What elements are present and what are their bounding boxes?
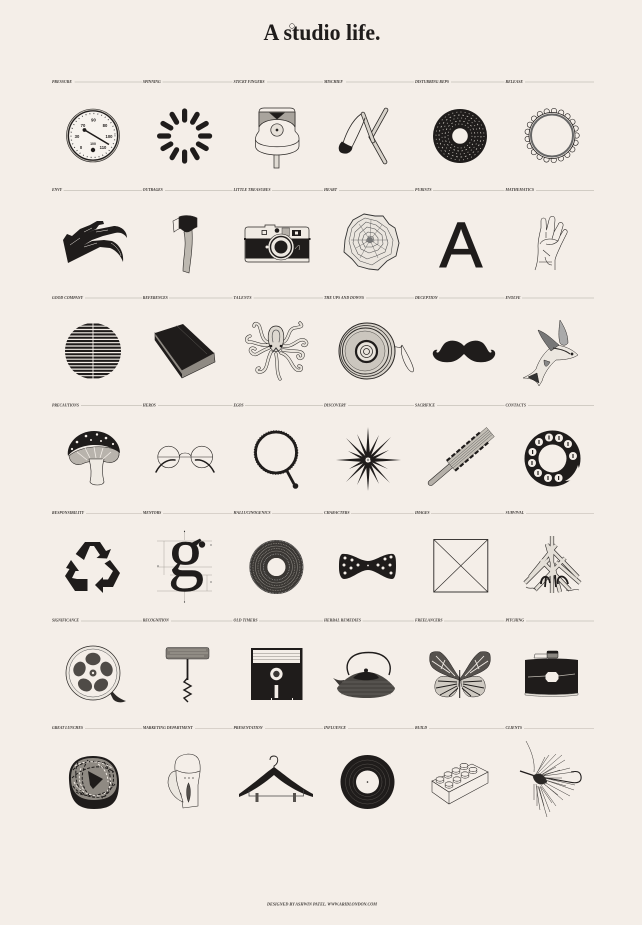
row 6 labels: HERBAL REMEDIES [323,619,361,623]
icon: hip flask [525,651,578,696]
icon: notebook [155,324,215,378]
row 5 labels: IMAGES [414,511,430,515]
row 5 labels [52,511,594,515]
row 3 labels: THE UPS AND DOWNS [324,296,364,300]
icon: iron teapot [333,652,395,698]
icon: boxing glove [168,754,200,808]
icon: bottle cap [527,111,577,160]
icon: film reel [66,646,126,702]
icon: coat hanger [239,756,313,802]
row 7 labels [52,726,594,730]
icon: tree rings [344,214,399,270]
icon: spinner [160,111,210,161]
icon: floppy disk [251,648,302,700]
row 5 labels: MENTORS [142,511,161,515]
row 1 labels: RELEASE [506,80,523,84]
icon: axe [173,216,197,273]
icon: pressure gauge: 80 [103,123,108,128]
icon: pressure gauge: 70 [81,123,86,128]
row 4 labels: CONTACTS [506,403,526,407]
icon: pressure gauge: 30 [75,134,80,139]
row 3 labels: DECEPTION [414,296,438,300]
row 1 labels: DISTURBING REPS [414,80,449,84]
icon: compass star [336,427,401,491]
icon: image placeholder [434,540,488,592]
icon: moustache [433,341,495,362]
icon: spaghetti ball [69,756,119,809]
row 1 labels: SPINNING [143,80,161,84]
row 3 labels: REFERENCES [143,296,168,300]
row 2 labels: HEART [323,188,338,192]
row 1 labels: PRESSURE [52,80,72,84]
icon: recycle [65,542,120,593]
row 2 labels: PURISTS [415,188,432,192]
icon: magnifying glass [254,431,298,489]
row 6 labels [52,619,594,623]
icon: corkscrew [166,648,209,702]
row 4 labels: SACRIFICE [415,403,435,407]
icon: octopus [247,323,307,379]
icon: typographic g: g [168,512,204,592]
icon: bow tie [339,554,396,579]
icon: typographic g [157,512,212,603]
row 7 labels: MARKETING DEPARTMENT [142,726,193,730]
row 3 labels: EVOLVE [504,296,521,300]
row 1 labels [52,80,594,84]
row 7 labels: GREAT LUNCHES [52,726,83,730]
icon: moire disc [250,541,303,593]
icon: claw [63,221,127,263]
row 7 labels: INFLUENCE [323,726,346,730]
row 5 labels: CHARACTERS [324,511,350,515]
icon: hand [535,216,567,270]
row 3 labels: TALENTS [234,296,252,300]
row 6 labels: RECOGNITION [143,619,169,623]
icon: vinyl record [340,755,394,809]
row 1 labels: STICKY FINGERS [234,80,264,84]
icon: lego brick [432,763,488,804]
row 5 labels: RESPONSIBILITY [52,511,85,515]
icon: pressure gauge: 90 [91,118,96,122]
icon: mushroom [68,431,120,485]
row 4 labels: DISCOVERY [323,403,347,407]
icon: letter A: A [440,209,483,281]
row 4 labels: HEROS [142,403,156,407]
row 7 labels: PRESENTATION [234,726,263,730]
row 6 labels: SIGNIFICANCE [52,619,79,623]
row 6 labels: FREELANCERS [415,619,442,623]
row 4 labels [52,403,594,407]
row 7 labels: CLIENTS [506,726,522,730]
icon: fishing fly [520,741,581,817]
row 1 labels: MISCHIEF [323,80,343,84]
icon: pressure gauge: 110 [100,145,107,150]
row 7 labels: BUILD [414,726,427,730]
icon: butterfly [430,652,490,698]
icon: harmonica [425,427,495,490]
row 3 labels [52,296,594,300]
icon: spray cap [256,108,299,168]
icon: pressure gauge: 100 [90,142,96,146]
icon: pressure gauge: 100 [106,134,113,139]
row 6 labels: PITCHING [506,619,524,623]
title: A studio life. [264,20,380,45]
icon: striped circle [64,323,122,379]
icon: glasses [156,446,214,472]
row 4 labels: PRECAUTIONS [52,403,79,407]
footer credit: DESIGNED BY ASHWIN PATEL. WWW.ARIDLONDON.COM [266,902,377,906]
row 5 labels: SURVIVAL [506,511,525,515]
row 2 labels: MATHEMATICS [504,188,534,192]
icon: yo-yo [339,323,414,379]
icon: slingshot [339,110,386,162]
row 2 labels: OUTRAGES [143,188,163,192]
row 2 labels: LITTLE TREASURES [232,188,270,192]
row 5 labels: HALLUCINOGENICS [232,511,270,515]
row 3 labels: GOOD COMPANY [52,296,84,300]
row 4 labels: EGOS [232,403,244,407]
icon: rotary dial [524,430,580,486]
row 6 labels: OLD TIMERS [234,619,258,623]
icon: camera [244,225,310,262]
icon: pressure gauge [66,109,120,162]
icon: flying fish [523,320,578,386]
row 2 labels: ENVY [51,188,63,192]
row 2 labels [51,188,594,192]
icon: pressure gauge: 0 [80,145,83,150]
icon: donut [433,109,487,163]
icon: campfire [525,536,580,593]
